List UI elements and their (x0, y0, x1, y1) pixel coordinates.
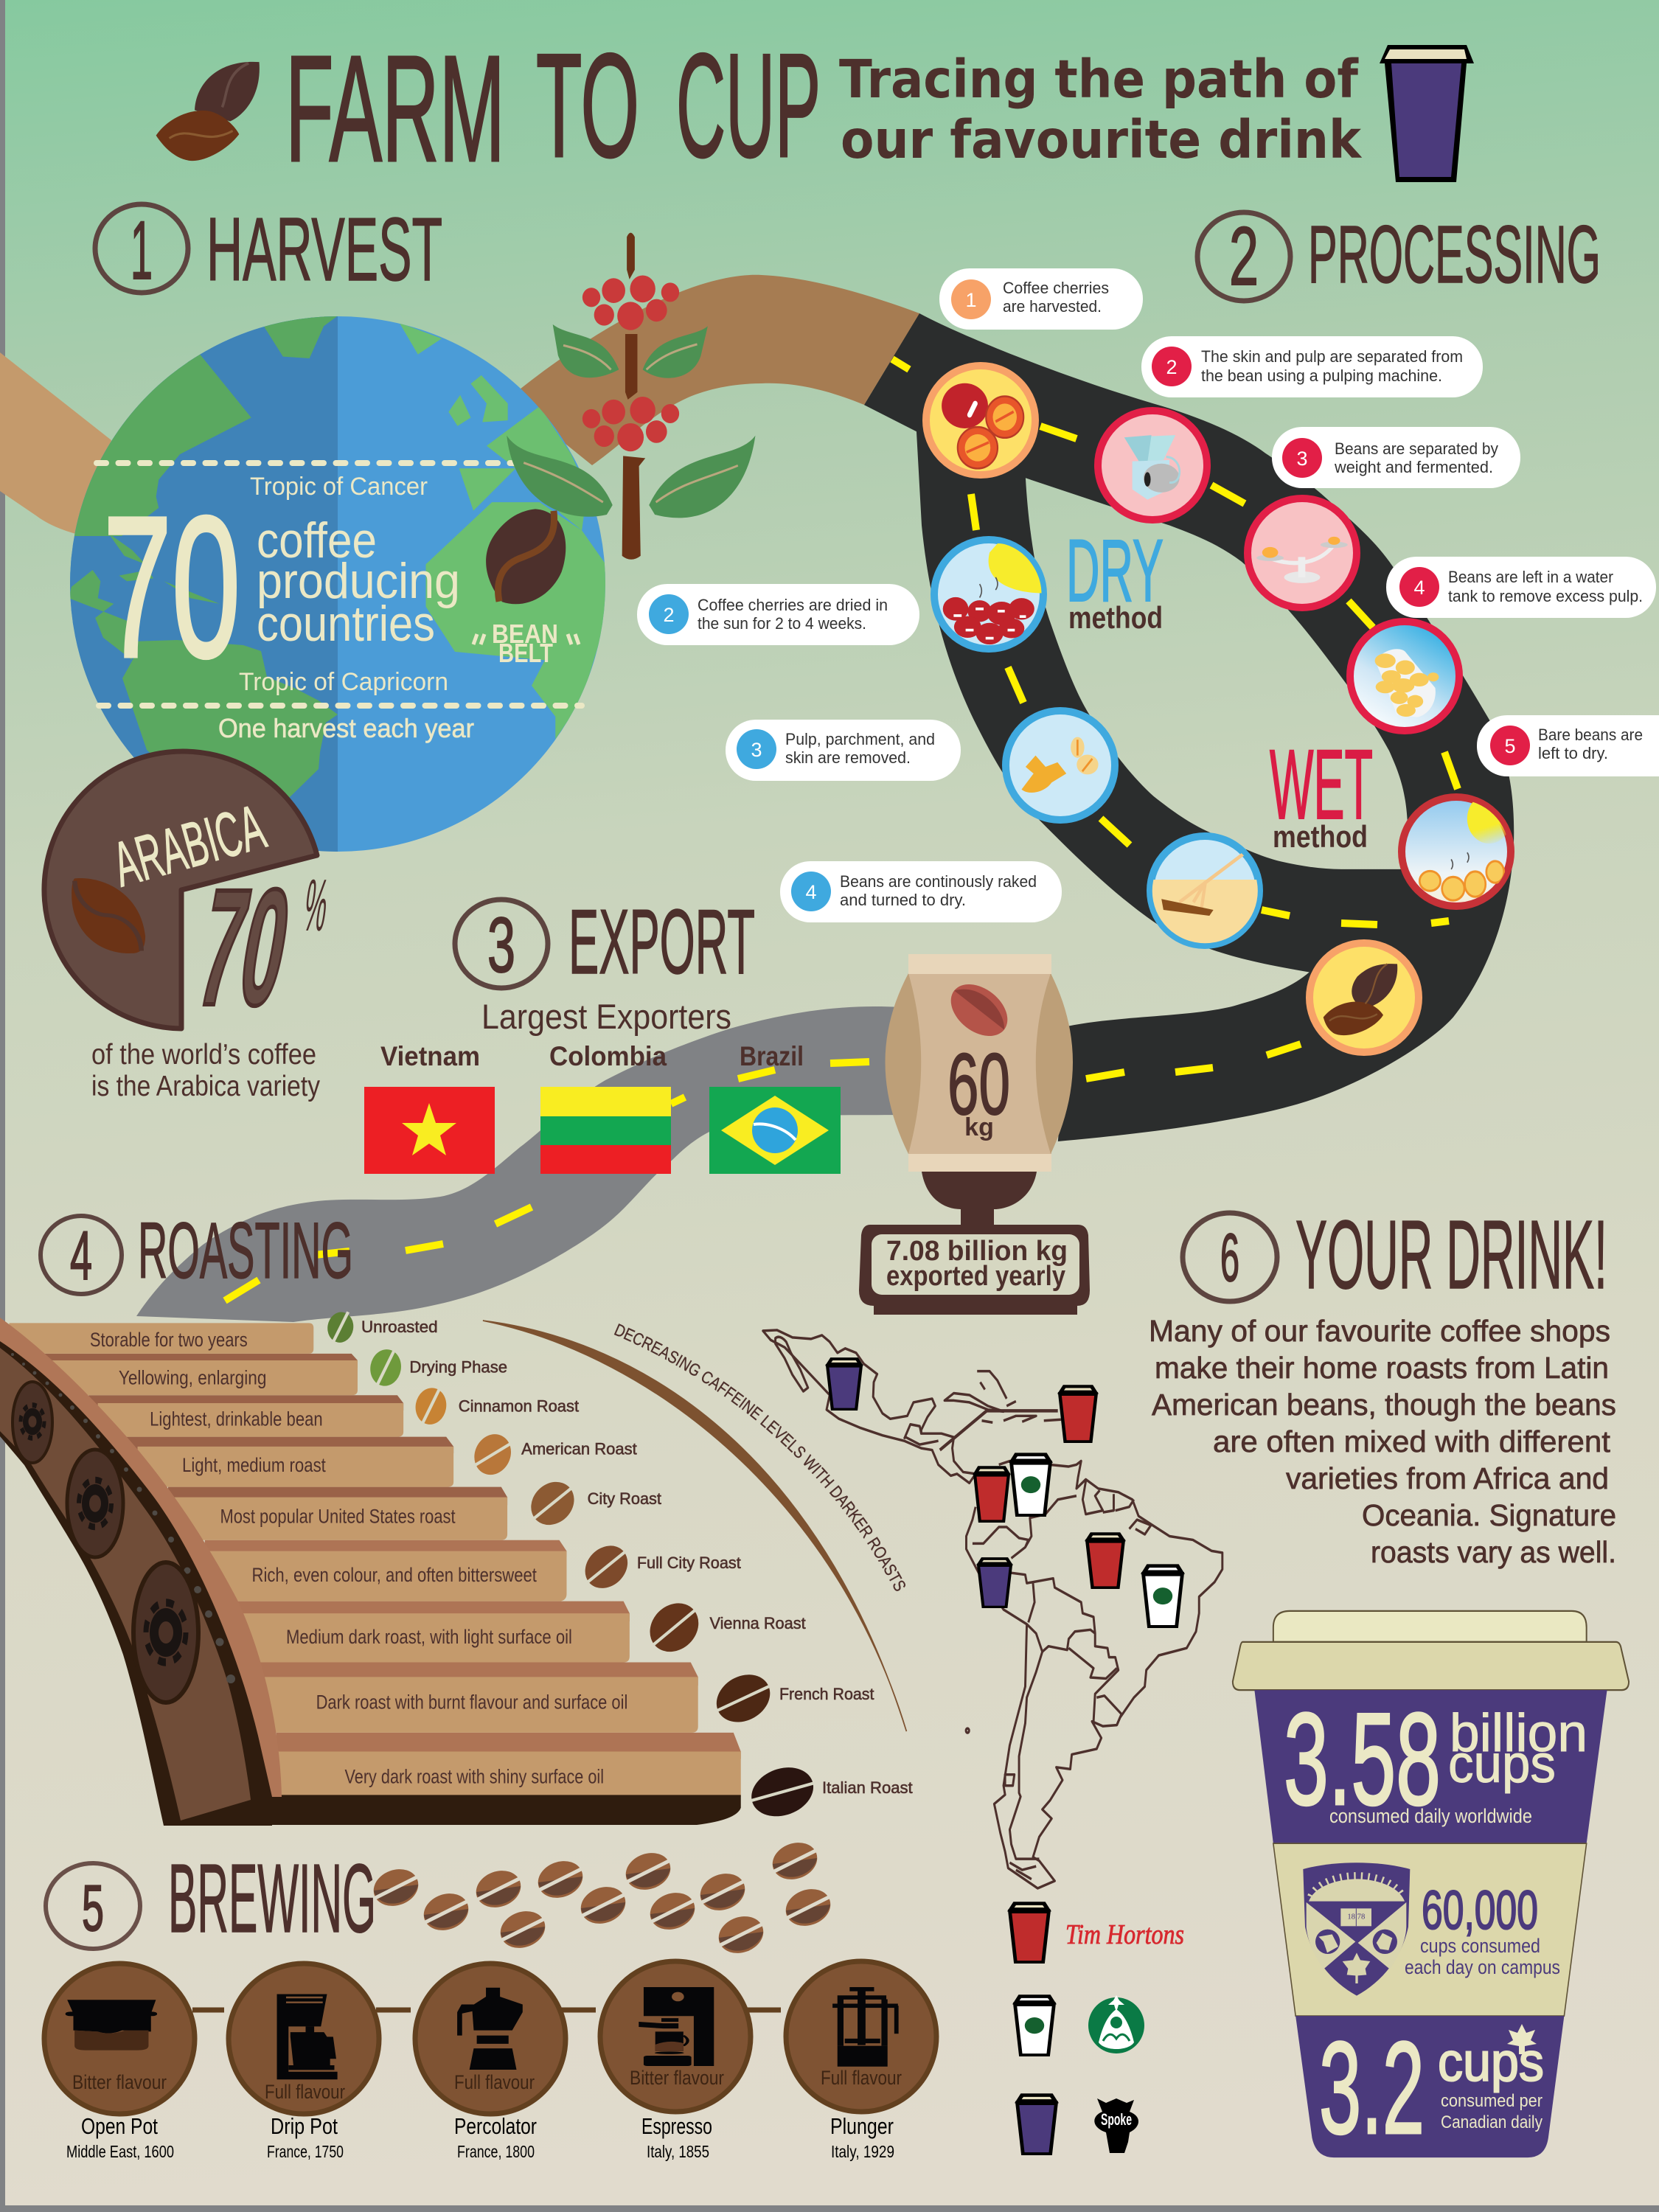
legend: Starbucks (1012, 1994, 1144, 2056)
callout dry 3: 3 (751, 739, 762, 761)
subtitle: our favourite drink (841, 109, 1363, 170)
callout wet 1: are harvested. (1003, 297, 1102, 316)
arabica caption (91, 1039, 320, 1102)
stair labels: Rich, even colour, and often bittersweet (252, 1564, 537, 1586)
callout wet 1: Coffee cherries (1003, 279, 1109, 297)
station: finished beans (1310, 943, 1419, 1052)
coffee shops paragraph: are often mixed with different (1213, 1425, 1611, 1458)
roast scale beans (325, 1309, 820, 1825)
road: dark processing road (864, 313, 1514, 1141)
callout wet 1 (939, 268, 1143, 330)
coffee sack on scale (859, 954, 1090, 1315)
exported yearly stat (886, 1236, 1068, 1292)
brew: open pot: Bitter flavour (72, 2071, 167, 2093)
road dashes: export road (225, 1062, 869, 1301)
callout dry 4 (780, 861, 1062, 922)
3.58 billion cups stat: consumed daily worldwide (1329, 1805, 1532, 1827)
heading: 1 harvest: 1 (131, 204, 153, 296)
globe dashed tropic lines (97, 463, 582, 706)
brewing names and origins: Italy, 1929 (831, 2142, 894, 2161)
heading: 6 your drink (1183, 1200, 1607, 1309)
road dashes: processing road (892, 359, 1458, 1079)
university crest: 18 78 (1347, 1913, 1365, 1921)
callout wet 3: weight and fermented. (1334, 458, 1493, 476)
brewing names and origins: Italy, 1855 (647, 2142, 709, 2161)
cup body (1254, 1690, 1607, 2157)
cups on map (825, 1357, 1185, 1627)
roaster arc band (0, 1318, 282, 1826)
station: removing parchment (1006, 711, 1115, 820)
callout dry 3: skin are removed. (785, 748, 911, 767)
stair labels: Very dark roast with shiny surface oil (345, 1766, 604, 1788)
heading: 4 roasting: ROASTING (138, 1206, 353, 1295)
stair labels: Lightest, drinkable bean (150, 1408, 323, 1430)
roast names: Italian Roast (822, 1778, 913, 1797)
stair base (164, 1795, 741, 1825)
heading: 6 your drink: 6 (1220, 1220, 1239, 1295)
label: dry method (1066, 521, 1164, 635)
callout dry 4: Beans are continously raked (840, 872, 1037, 891)
sack: kg (964, 1113, 994, 1141)
heading: 5 brewing: 5 (82, 1871, 104, 1944)
exported yearly stat: exported yearly (886, 1261, 1065, 1292)
icon: maple leaf (1507, 2024, 1537, 2054)
stair labels: Most popular United States roast (220, 1505, 456, 1527)
callout wet 2: The skin and pulp are separated from (1201, 347, 1463, 366)
text: WET (1270, 730, 1373, 840)
bean belt bean (480, 502, 571, 611)
brewing names and origins: Plunger (830, 2113, 894, 2139)
road: brown farm road (509, 275, 919, 465)
bean belt label (473, 619, 579, 668)
callout wet 5: left to dry. (1538, 744, 1608, 762)
coffee shops paragraph: make their home roasts from Latin (1155, 1351, 1609, 1385)
60,000 campus stat: cups consumed (1420, 1935, 1540, 1957)
stair labels: Storable for two years (90, 1329, 248, 1351)
arm: tan road from left edge (0, 352, 111, 538)
roasting staircase (9, 1323, 741, 1825)
arabica caption: is the Arabica variety (91, 1071, 320, 1102)
brewing names and origins: France, 1800 (457, 2142, 535, 2161)
stair labels: Light, medium roast (182, 1454, 326, 1476)
bean belt label: BELT (498, 638, 553, 668)
70 percent: 70 (187, 855, 302, 1040)
3.58 billion cups stat: billion (1450, 1704, 1587, 1763)
brew: open pot (44, 1964, 195, 2114)
legend: Tim Hortons (1007, 1902, 1184, 1963)
university crest (1303, 1863, 1410, 1996)
callout wet 3: 3 (1296, 448, 1308, 470)
brew: percolator (415, 1964, 566, 2114)
arabica pie chart (44, 751, 333, 1040)
callout dry 2: the sun for 2 to 4 weeks. (698, 614, 866, 633)
heading: 4 roasting: 4 (70, 1217, 92, 1294)
heading: 3 export (455, 891, 755, 993)
flag: Vietnam (364, 1041, 495, 1174)
60,000 campus stat (1405, 1879, 1560, 1978)
sack: 60 (947, 1036, 1010, 1133)
brewing methods timeline (44, 1961, 936, 2114)
legend: Spoke: Spoke (1101, 2110, 1132, 2129)
brewing names and origins (66, 2113, 894, 2161)
flag: Brazil (709, 1041, 841, 1174)
70 figure: 70 (103, 475, 240, 699)
heading: 2 processing: 2 (1229, 210, 1259, 302)
3.58 billion cups stat: cups (1448, 1735, 1556, 1794)
callout dry 3: Pulp, parchment, and (785, 730, 935, 748)
label: wet method: method (1273, 819, 1368, 854)
callout wet 2: the bean using a pulping machine. (1201, 366, 1442, 385)
callout wet 1: 1 (965, 289, 977, 311)
flag: Colombia (540, 1041, 671, 1174)
decorative falling beans (369, 1837, 835, 1959)
3.2 cups stat: 3.2 (1319, 2014, 1425, 2161)
text: EXPORT (568, 891, 755, 993)
roast names: Unroasted (361, 1318, 438, 1336)
heading: 1 harvest (95, 199, 442, 299)
scale base (859, 1225, 1090, 1315)
roast names: Cinnamon Roast (459, 1397, 580, 1416)
label: dry method: DRY (1066, 521, 1164, 620)
coffee shops paragraph (1149, 1314, 1616, 1569)
legend: Spoke (1015, 2093, 1138, 2154)
roast names: American Roast (521, 1440, 638, 1458)
coffee producing countries: coffee (257, 512, 377, 568)
brew: plunger (786, 1961, 936, 2112)
arabica caption: of the world’s coffee (91, 1039, 316, 1071)
stair labels: Dark roast with burnt flavour and surface oil (316, 1691, 627, 1713)
coffee shops paragraph: varieties from Africa and (1286, 1461, 1609, 1495)
callout wet 4: 4 (1413, 577, 1425, 599)
coffee shops paragraph: Oceania. Signature (1362, 1498, 1616, 1532)
callout dry 4: 4 (805, 881, 817, 903)
roast names (361, 1318, 913, 1797)
coffee plant (507, 233, 755, 560)
legend: Tim Hortons: Tim Hortons (1065, 1919, 1184, 1950)
caffeine arc (483, 1321, 906, 1731)
heading: 2 processing (1197, 209, 1601, 302)
roast names: Vienna Roast (709, 1614, 806, 1632)
station: water tank (1350, 622, 1459, 731)
scale stand (922, 1172, 1037, 1225)
coffee shops paragraph: American beans, though the beans (1152, 1388, 1616, 1422)
3.2 cups stat: Canadian daily (1441, 2112, 1543, 2132)
coffee shops paragraph: Many of our favourite coffee shops (1149, 1314, 1610, 1348)
callout dry 2: 2 (663, 604, 675, 626)
60,000 campus stat: each day on campus (1405, 1956, 1560, 1978)
One harvest each year: One harvest each year (218, 713, 474, 743)
brewing names and origins: Open Pot (81, 2113, 158, 2139)
flag: Colombia: Colombia (549, 1041, 667, 1071)
callouts: wet method (939, 268, 1659, 776)
heading: 4 roasting (41, 1206, 353, 1295)
callout wet 4 (1386, 557, 1656, 618)
callout wet 5: 5 (1504, 735, 1516, 757)
callout wet 3 (1272, 427, 1520, 488)
brewing names and origins: France, 1750 (267, 2142, 344, 2161)
caffeine arc label: DECREASING CAFFEINE LEVELS WITH DARKER ROASTS (613, 1324, 905, 1591)
callout wet 3: Beans are separated by (1335, 439, 1499, 458)
callout wet 5: Bare beans are (1538, 726, 1643, 744)
callout wet 4: tank to remove excess pulp. (1448, 587, 1643, 605)
exported yearly stat: 7.08 billion kg (886, 1236, 1068, 1267)
callout dry 2 (637, 584, 919, 645)
station: pulping machine (1098, 411, 1207, 520)
brewing names and origins: Espresso (641, 2113, 712, 2139)
coffee producing countries (257, 512, 460, 652)
icon: purple cup in title (1380, 45, 1474, 182)
station: sun drying cherries (934, 540, 1043, 649)
Tropic of Capricorn label: Tropic of Capricorn (239, 668, 448, 696)
brew: plunger: Full flavour (821, 2067, 902, 2089)
brew: espresso machine: Bitter flavour (630, 2067, 724, 2089)
3.2 cups stat: cups (1438, 2031, 1544, 2093)
callouts: dry method (637, 584, 1062, 922)
roast names: Full City Roast (637, 1554, 741, 1572)
brew: espresso machine (600, 1961, 751, 2112)
text: BREWING (168, 1844, 376, 1952)
text: CUP (676, 24, 821, 188)
subtitle (839, 49, 1363, 170)
stair labels (90, 1329, 627, 1788)
60,000 campus stat: 60,000 (1422, 1879, 1538, 1941)
brew: percolator: Full flavour (454, 2071, 535, 2093)
callout wet 5 (1477, 715, 1659, 776)
brewing names and origins: Middle East, 1600 (66, 2142, 174, 2161)
text: % (299, 864, 333, 947)
station: weighing scale (1248, 498, 1357, 608)
brewing names and origins: Drip Pot (271, 2113, 338, 2139)
subtitle: Tracing the path of (839, 49, 1359, 110)
title: Farm to Cup: FARM (285, 24, 505, 193)
callout dry 3 (726, 720, 961, 781)
heading: 5 brewing (46, 1844, 376, 1952)
coffee producing countries: countries (257, 596, 435, 652)
roasting chart labels and beans (83, 1290, 940, 1854)
brewing names and origins: Percolator (454, 2113, 537, 2139)
coffee shops paragraph: roasts vary as well. (1371, 1535, 1616, 1569)
stair labels: Yellowing, enlarging (119, 1366, 266, 1388)
heading: 3 export: 3 (487, 902, 515, 989)
3.2 cups stat: consumed per (1441, 2091, 1543, 2111)
largest exporters: Largest Exporters (481, 997, 731, 1036)
title: Farm to Cup: TO (536, 24, 639, 188)
roaster gears (13, 1382, 198, 1703)
3.58 billion cups stat: 3.58 (1284, 1686, 1441, 1832)
roast names: Drying Phase (409, 1358, 507, 1377)
flag: Vietnam: Vietnam (380, 1041, 480, 1071)
station: harvest cherries (926, 366, 1035, 475)
heading: 1 harvest: HARVEST (206, 199, 442, 299)
big coffee cup (1233, 1611, 1629, 2161)
callout wet 2: 2 (1166, 356, 1178, 378)
sack (885, 954, 1073, 1172)
callout dry 4: and turned to dry. (840, 891, 966, 909)
road: export grey road (136, 1006, 900, 1322)
roast names: City Roast (588, 1489, 662, 1508)
brew: drip pot (229, 1964, 379, 2114)
roast names: French Roast (779, 1685, 874, 1703)
globe (53, 316, 605, 852)
Tropic of Cancer label: Tropic of Cancer (250, 473, 428, 501)
station: raking beans (1150, 836, 1265, 950)
cup lid (1233, 1611, 1629, 1690)
label: dry method: method (1068, 600, 1163, 635)
flag: Brazil: Brazil (740, 1041, 804, 1071)
callout wet 2 (1141, 336, 1483, 397)
label: wet method (1270, 730, 1373, 854)
map of Latin America (763, 1330, 1222, 1888)
arabica label: ARABICA (105, 791, 273, 900)
bean in pie (72, 878, 145, 953)
coffee producing countries: producing (257, 553, 460, 609)
callout dry 2: Coffee cherries are dried in (698, 596, 888, 614)
bean belt label: BEAN (492, 619, 558, 649)
callout wet 4: Beans are left in a water (1448, 568, 1613, 586)
station: wet drying beans (1402, 794, 1511, 906)
title bean icon (156, 62, 260, 161)
brew: drip pot: Full flavour (265, 2081, 345, 2103)
stair labels: Medium dark roast, with light surface oil (286, 1626, 572, 1648)
